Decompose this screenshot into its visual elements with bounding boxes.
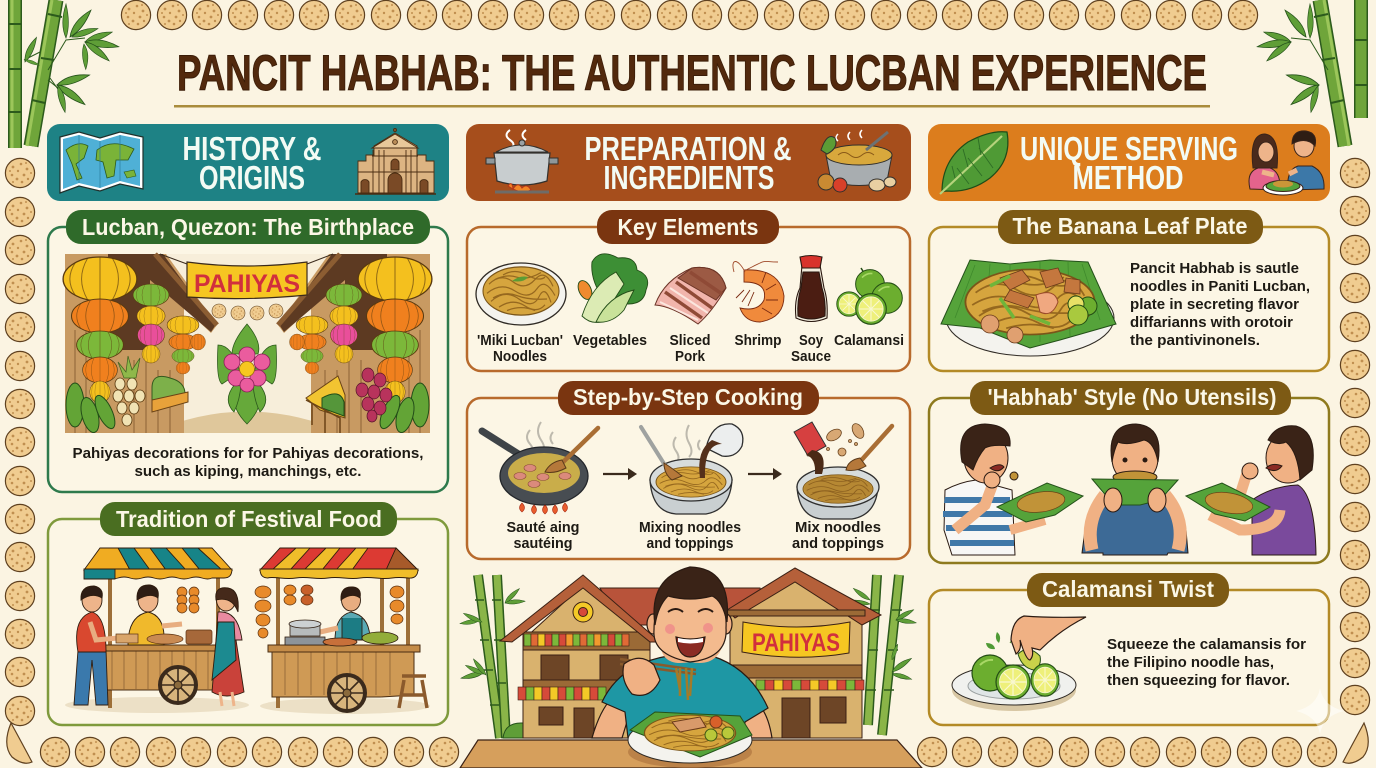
caption: Pahiyas decorations for for Pahiyas decorations, <box>72 445 424 462</box>
pill heading <box>597 210 779 244</box>
description: then squeezing for flavor. <box>1107 672 1290 689</box>
ingredient labels: Vegetables <box>573 333 647 349</box>
step captions: Mixing noodles <box>639 520 741 536</box>
ingredient labels <box>477 333 904 365</box>
panel: Lucban, Quezon <box>48 210 448 492</box>
icon: world map <box>60 132 143 193</box>
panel: habhab style <box>929 381 1329 563</box>
left produce <box>113 356 188 426</box>
arrow <box>603 468 637 480</box>
vendor <box>128 585 182 645</box>
Pahiyas banner on house: PAHIYAS <box>752 629 840 657</box>
heading: HISTORY & <box>182 130 322 167</box>
step captions <box>506 520 884 552</box>
food on cart <box>116 630 212 644</box>
sparkle watermark <box>1296 688 1344 734</box>
bamboo: right of houses <box>849 575 917 735</box>
icon: soy sauce bottle <box>796 256 827 322</box>
icon: shrimp <box>733 261 784 322</box>
hanging food <box>255 585 404 638</box>
description: Squeeze the calamansis for <box>1107 636 1306 653</box>
description: the pantivinonels. <box>1130 332 1260 349</box>
awning <box>84 548 232 579</box>
step captions: Mix noodles <box>795 520 881 536</box>
panel: banana leaf plate <box>929 210 1329 371</box>
panel: key elements <box>467 210 910 371</box>
icon: pot with noodles and ingredients <box>818 130 896 192</box>
illustration: Pahiyas street <box>63 254 432 434</box>
bamboo: left of houses <box>460 575 525 738</box>
person 2 eating from folded leaf <box>1082 424 1188 555</box>
description <box>1107 636 1306 689</box>
pill heading: Key Elements <box>618 214 758 240</box>
heading: UNIQUE SERVING <box>1020 130 1238 167</box>
heading: ORIGINS <box>199 159 305 196</box>
ingredient labels: Shrimp <box>734 333 782 349</box>
pill heading: The Banana Leaf Plate <box>1012 213 1248 239</box>
ingredient labels: Sauce <box>791 349 831 365</box>
description: the Filipino noodle has, <box>1107 654 1274 671</box>
step 3: mix toppings <box>794 422 892 519</box>
hand <box>1011 616 1086 660</box>
icon: calamansi <box>837 268 902 324</box>
icon: steaming pot <box>486 130 558 192</box>
right produce <box>306 368 392 433</box>
step 2: mixing bowl <box>641 424 743 514</box>
caption <box>72 445 424 480</box>
right stall <box>278 254 432 434</box>
heading: PREPARATION & <box>584 130 792 167</box>
header: preparation and ingredients <box>466 124 911 201</box>
step captions: and toppings <box>792 536 884 552</box>
heading <box>584 130 792 196</box>
pill heading: 'Habhab' Style (No Utensils) <box>988 384 1276 410</box>
seller woman <box>212 588 244 706</box>
panel: tradition of festival food <box>48 502 448 725</box>
awning <box>260 548 418 578</box>
arrow <box>748 468 782 480</box>
Pahiyas banner <box>160 254 333 299</box>
cook <box>320 587 370 640</box>
person 3 eating from leaf <box>1186 426 1316 555</box>
right house <box>725 568 881 738</box>
customer <box>74 586 118 705</box>
description: diffarianns with orotoir <box>1130 314 1293 331</box>
step captions: and toppings <box>646 536 734 552</box>
heading: INGREDIENTS <box>604 159 774 196</box>
pill heading: Tradition of Festival Food <box>116 506 382 532</box>
ingredient labels: Calamansi <box>834 333 904 349</box>
illustration: squeezing calamansi <box>952 616 1086 711</box>
heading: METHOD <box>1072 159 1184 196</box>
Pahiyas banner on house <box>742 622 850 657</box>
boy <box>592 567 772 738</box>
header: unique serving method <box>928 124 1330 201</box>
ingredient labels: 'Miki Lucban' <box>477 333 563 349</box>
ingredient labels: Soy <box>799 333 823 349</box>
plate of pancit on banana leaf <box>628 712 752 768</box>
description: Pancit Habhab is sautle <box>1130 260 1299 277</box>
pot and food on cart <box>285 620 398 646</box>
step 1: saute in pan <box>482 422 598 514</box>
person 1 eating from leaf <box>943 424 1083 555</box>
icon: Lucban church <box>355 128 436 194</box>
centre illustration: boy eating at table <box>460 567 922 768</box>
ingredient labels: Noodles <box>493 349 547 365</box>
ingredient labels: Sliced <box>670 333 710 349</box>
kiping strings <box>212 304 283 320</box>
back roof <box>600 588 775 625</box>
icon: miki noodles <box>476 263 566 325</box>
step captions: Sauté aing <box>506 520 580 536</box>
bamboo: top right <box>1257 0 1368 146</box>
hanging food <box>177 587 199 613</box>
table <box>460 740 922 768</box>
title underline <box>174 105 1210 108</box>
ingredient labels: Pork <box>675 349 706 365</box>
left stall with lanterns (mirrored right) <box>63 254 217 434</box>
description: plate in secreting flavor <box>1130 296 1299 313</box>
icon: vegetables <box>575 254 648 322</box>
pill heading <box>1027 573 1229 607</box>
illustration: pancit on banana leaf <box>941 260 1116 356</box>
pill heading: Step-by-Step Cooking <box>573 384 803 410</box>
bamboo: top left <box>8 0 119 148</box>
description <box>1130 260 1310 349</box>
header: history and origins <box>47 124 449 201</box>
description: noodles in Paniti Lucban, <box>1130 278 1310 295</box>
step captions: sautéing <box>514 536 572 552</box>
panel: step-by-step cooking <box>467 381 910 559</box>
icon: sliced pork <box>655 267 726 324</box>
Pahiyas banner: PAHIYAS <box>194 270 300 298</box>
illustration: food cart 1 <box>65 548 249 713</box>
pill heading: Calamansi Twist <box>1042 576 1214 602</box>
panel: calamansi twist <box>929 573 1329 725</box>
illustration: food cart 2 <box>255 548 430 714</box>
icon: banana leaf <box>940 132 1008 194</box>
heading <box>1020 130 1238 196</box>
heading <box>182 130 322 196</box>
caption: such as kiping, manchings, etc. <box>134 463 362 480</box>
left house <box>500 575 660 738</box>
pill heading: Lucban, Quezon: The Birthplace <box>82 214 414 240</box>
icon: couple eating <box>1249 131 1324 195</box>
centre flower decoration <box>218 324 276 424</box>
